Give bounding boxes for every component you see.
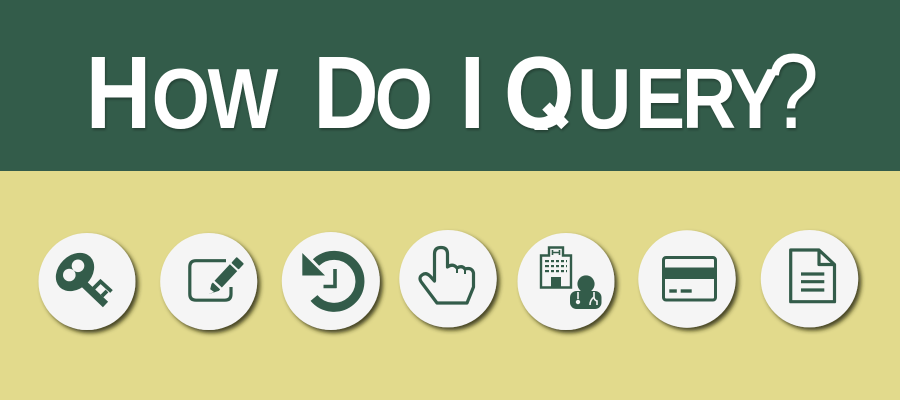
title: UERY xyxy=(577,52,780,146)
icon: key xyxy=(38,233,136,330)
title: OW xyxy=(152,52,279,146)
icon: hospital and doctor xyxy=(518,233,614,330)
icon: history clock xyxy=(282,232,380,330)
title xyxy=(92,54,817,132)
title: ? xyxy=(766,32,819,151)
header band xyxy=(0,0,900,171)
title: Q tail accent xyxy=(546,106,565,126)
icon: pointing hand xyxy=(399,230,497,327)
icon: credit card xyxy=(638,230,736,328)
title: H xyxy=(86,35,151,150)
title: O xyxy=(375,52,433,146)
title: D xyxy=(313,35,379,150)
title: Q xyxy=(504,35,575,150)
icon: document xyxy=(761,230,858,327)
icon: edit pencil xyxy=(160,233,257,330)
title: I xyxy=(460,35,485,150)
